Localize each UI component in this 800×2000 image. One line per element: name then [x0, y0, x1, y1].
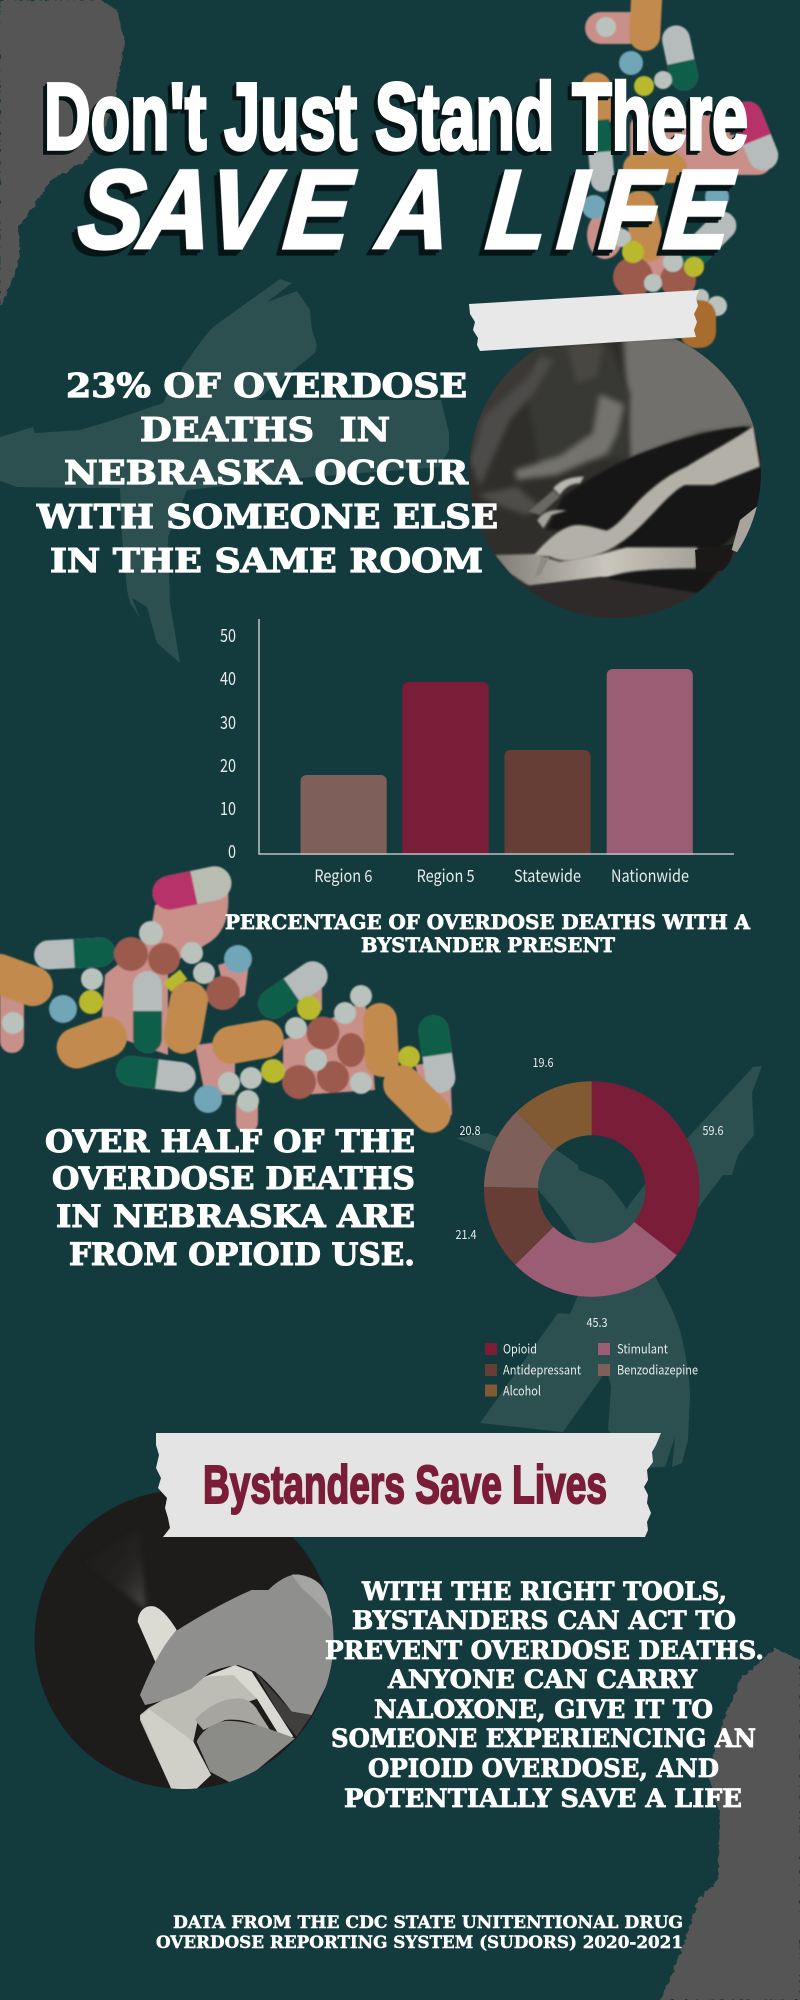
spray mist — [120, 1561, 148, 1608]
chart caption: PERCENTAGE OF OVERDOSE DEATHS WITH A — [225, 911, 751, 934]
x axis labels: Statewide — [514, 862, 581, 887]
x axis labels: Region 6 — [314, 862, 372, 887]
donut values: 45.3 — [586, 1312, 608, 1331]
donut legend: Opioid — [503, 1338, 537, 1358]
y axis labels: 0 — [228, 838, 236, 864]
segment: antidepressant — [484, 1187, 554, 1265]
segment: stimulant — [515, 1222, 677, 1297]
donut values — [456, 1052, 724, 1331]
seated man — [470, 343, 630, 515]
donut legend: Benzodiazepine — [617, 1360, 698, 1378]
pills cluster: top right — [577, 0, 783, 348]
text: opioid statement: FROM OPIOID USE. — [69, 1237, 415, 1273]
device body — [140, 1675, 257, 1789]
ghost hand: upper — [0, 279, 449, 663]
tape: bystanders heading — [156, 1433, 661, 1537]
y axis labels: 10 — [220, 795, 236, 821]
ghost hand: lower — [456, 1066, 762, 1468]
wall — [623, 337, 760, 460]
torn paper: bottom right — [660, 1648, 800, 2000]
text: opioid statement — [45, 1124, 415, 1273]
photo: nasal spray in hand — [34, 1492, 334, 1789]
segment: benzodiazepine — [484, 1112, 554, 1188]
bar chart — [220, 619, 734, 887]
y axis labels: 30 — [220, 709, 236, 735]
x axis labels: Region 5 — [417, 862, 475, 887]
text: 23 percent statement: WITH SOMEONE ELSE — [36, 497, 498, 536]
title — [44, 64, 748, 272]
text: naloxone statement — [325, 1577, 764, 1814]
donut values: 19.6 — [532, 1052, 554, 1071]
floor — [526, 576, 696, 602]
black leggings and torso — [547, 427, 763, 548]
shoes — [528, 477, 584, 528]
bars — [300, 775, 387, 855]
capsule: vertical — [133, 971, 162, 1053]
y axis labels: 20 — [220, 752, 236, 778]
text: naloxone statement: SOMEONE EXPERIENCING AN — [331, 1724, 756, 1754]
segment: alcohol — [517, 1081, 592, 1150]
torn paper: top left — [0, 0, 125, 305]
segment: opioid — [592, 1081, 699, 1255]
thumb — [197, 1721, 295, 1783]
text: opioid statement: IN NEBRASKA ARE — [56, 1199, 415, 1235]
y axis labels: 40 — [220, 665, 236, 691]
y axis labels — [220, 622, 236, 864]
text: 23 percent statement: DEATHS IN — [140, 410, 390, 449]
footer source note — [156, 1913, 683, 1953]
donut chart — [456, 1052, 724, 1331]
x axis labels — [314, 862, 689, 887]
donut legend: Antidepressant — [503, 1360, 581, 1378]
text: 23 percent statement: IN THE SAME ROOM — [50, 541, 483, 580]
nozzle — [138, 1606, 177, 1665]
text: 23 percent statement: 23% OF OVERDOSE — [66, 366, 467, 405]
lower arm — [495, 547, 697, 587]
chart caption — [225, 911, 751, 957]
axes — [259, 619, 734, 854]
text: naloxone statement: WITH THE RIGHT TOOLS, — [361, 1577, 727, 1607]
capsule: pink and white — [149, 863, 235, 913]
text: naloxone statement: POTENTIALLY SAVE A LIFE — [344, 1784, 742, 1814]
donut values: 20.8 — [460, 1120, 481, 1139]
photo: man and woman on floor — [469, 338, 761, 618]
text: opioid statement: OVER HALF OF THE — [45, 1124, 415, 1160]
heading: Bystanders Save Lives — [203, 1455, 607, 1515]
donut values: 21.4 — [456, 1224, 477, 1243]
capsule: green and white — [33, 937, 116, 970]
donut legend: Stimulant — [617, 1338, 668, 1358]
text: naloxone statement: NALOXONE, GIVE IT TO — [374, 1695, 713, 1725]
text: naloxone statement: BYSTANDERS CAN ACT TO — [352, 1606, 736, 1636]
text: opioid statement: OVERDOSE DEATHS — [52, 1161, 415, 1197]
title line 2: SAVE A LIFE — [74, 147, 740, 272]
donut legend: Alcohol — [503, 1380, 541, 1400]
text: naloxone statement: OPIOID OVERDOSE, AND — [368, 1754, 719, 1784]
text: naloxone statement: ANYONE CAN CARRY — [387, 1665, 698, 1695]
text: naloxone statement: PREVENT OVERDOSE DEATHS. — [325, 1636, 764, 1666]
hair — [604, 566, 719, 594]
finger — [140, 1574, 334, 1715]
y axis labels: 50 — [220, 622, 236, 648]
outstretched arm — [533, 426, 760, 561]
donut values: 59.6 — [702, 1120, 724, 1139]
x axis labels: Nationwide — [611, 862, 689, 887]
text: 23 percent statement: NEBRASKA OCCUR — [64, 453, 469, 492]
footer source note: OVERDOSE REPORTING SYSTEM (SUDORS) 2020-2021 — [156, 1933, 683, 1953]
text: 23 percent statement — [36, 366, 498, 580]
pills cluster: middle left — [0, 863, 459, 1141]
footer source note: DATA FROM THE CDC STATE UNITENTIONAL DRUG — [173, 1913, 683, 1933]
tape: top — [469, 290, 699, 351]
donut legend — [485, 1338, 698, 1400]
chart caption: BYSTANDER PRESENT — [361, 934, 615, 957]
